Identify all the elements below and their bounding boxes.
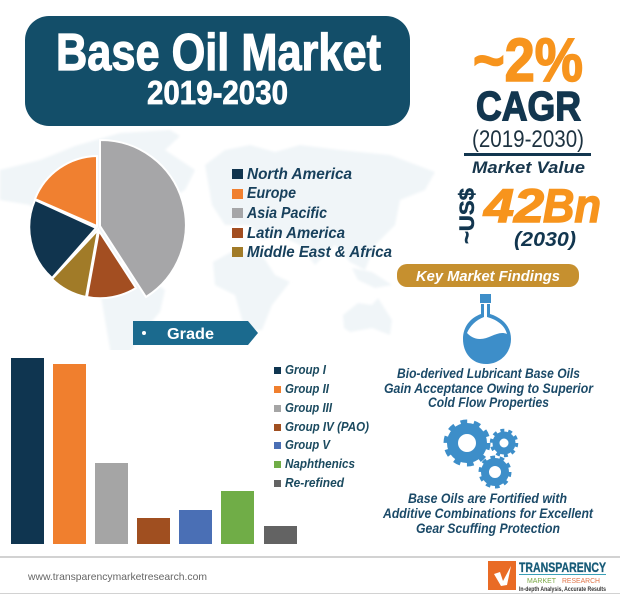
icon: flask [463, 294, 511, 364]
bar legend: Group III [285, 401, 332, 415]
key market findings pill: Key Market Findings [416, 268, 560, 285]
pie legend: Latin America [247, 225, 345, 242]
finding text 1: Bio-derived Lubricant Base Oils [397, 365, 580, 381]
footer rules [0, 556, 620, 594]
pie legend: Middle East & Africa [247, 244, 392, 261]
market value callout: Bn [543, 179, 601, 232]
market value callout: (2030) [514, 229, 576, 251]
grade label arrow [133, 321, 258, 345]
CAGR callout [464, 26, 591, 156]
finding text 2: Additive Combinations for Excellent [382, 505, 594, 521]
key market findings pill [397, 264, 579, 287]
website url: www.transparencymarketresearch.com [27, 571, 207, 583]
bar chart: grade [0, 350, 300, 545]
bar legend: Re-refined [285, 476, 344, 490]
market value callout [456, 158, 601, 251]
CAGR callout: CAGR [476, 83, 581, 129]
finding text 2 [382, 490, 594, 536]
market value callout: ~US$ [456, 188, 479, 244]
grade label arrow: Grade [167, 326, 214, 343]
bar legend: Group II [285, 382, 329, 396]
market value callout: 42 [483, 179, 544, 232]
CAGR callout: ~2% [473, 26, 583, 94]
pie legend [232, 166, 392, 261]
title text: Base Oil Market [56, 24, 381, 82]
finding text 1: Gain Acceptance Owing to Superior [384, 380, 594, 396]
finding text 1: Cold Flow Properties [428, 394, 549, 410]
CAGR callout: (2019-2030) [472, 126, 584, 153]
bar legend: Group V [285, 438, 332, 452]
pie legend: Europe [247, 185, 296, 202]
bar legend [274, 363, 369, 490]
logo: MARKET [527, 576, 556, 585]
icon: gears [446, 422, 516, 486]
pie chart: regional share [29, 140, 186, 298]
pie legend: Asia Pacific [246, 205, 327, 222]
market value callout: Market Value [472, 158, 585, 177]
logo [488, 560, 606, 593]
finding text 2: Base Oils are Fortified with [408, 490, 567, 506]
logo: RESEARCH [562, 576, 600, 585]
pie legend: North America [247, 166, 352, 183]
world map background [0, 130, 435, 362]
title years: 2019-2030 [147, 74, 288, 111]
bar legend: Group IV (PAO) [285, 420, 369, 434]
title banner [25, 16, 410, 126]
bar legend: Naphthenics [285, 457, 355, 471]
bar legend: Group I [285, 363, 326, 377]
finding text 1 [384, 365, 594, 410]
finding text 2: Gear Scuffing Protection [416, 520, 560, 536]
